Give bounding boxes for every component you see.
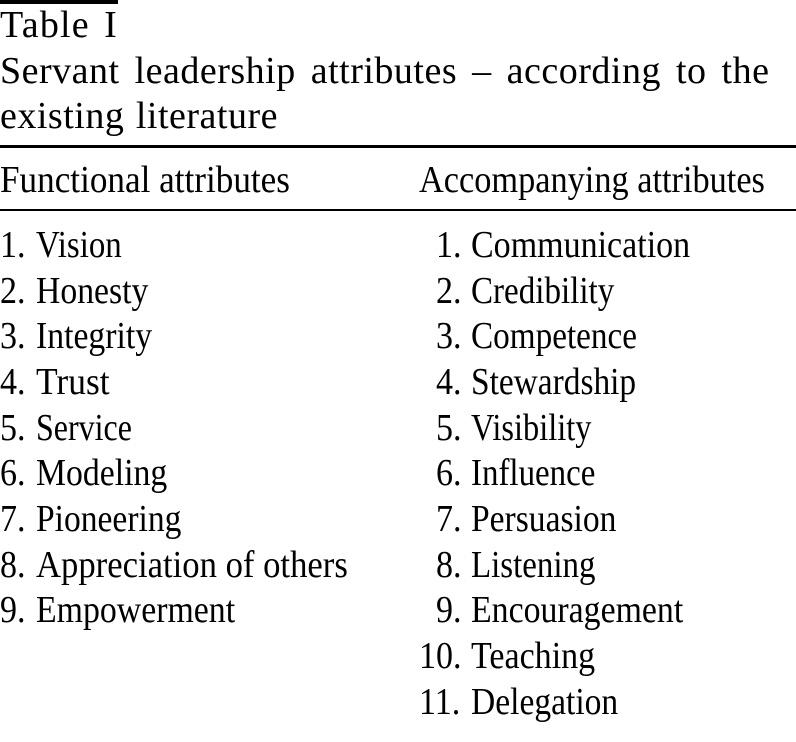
header rule (0, 145, 796, 148)
accompanying attributes list: 2. (436, 270, 462, 312)
accompanying attributes list: 5. (436, 407, 462, 449)
functional attributes list: Service (36, 407, 132, 449)
accompanying attributes list: 8. (436, 544, 462, 586)
functional attributes list: 5. (0, 407, 26, 449)
functional attributes list: 8. (0, 544, 26, 586)
accompanying attributes list: Persuasion (471, 498, 616, 540)
table label: Table I (0, 4, 118, 46)
functional attributes list: Empowerment (36, 589, 235, 631)
accompanying attributes list: 10. (419, 635, 462, 677)
accompanying attributes list: Influence (471, 452, 595, 494)
accompanying attributes list: Communication (471, 224, 690, 266)
accompanying attributes list: Encouragement (471, 589, 683, 631)
accompanying attributes list: Competence (471, 315, 637, 357)
functional attributes list: Modeling (36, 452, 167, 494)
functional attributes list: Honesty (36, 270, 148, 312)
functional attributes list: 7. (0, 498, 26, 540)
accompanying attributes list (419, 224, 690, 723)
functional attributes list: 4. (0, 361, 26, 403)
table title: Servant leadership attributes – according to the (0, 50, 769, 92)
functional attributes list: 9. (0, 589, 26, 631)
functional attributes list: 3. (0, 315, 26, 357)
functional attributes list: 6. (0, 452, 26, 494)
functional attributes list: Integrity (36, 315, 152, 357)
accompanying attributes list: 4. (436, 361, 462, 403)
column headers: Accompanying attributes (419, 159, 765, 201)
accompanying attributes list: Delegation (471, 681, 618, 723)
top rule (0, 0, 118, 4)
functional attributes list: 2. (0, 270, 26, 312)
header bottom rule (0, 209, 796, 211)
accompanying attributes list: Teaching (471, 635, 595, 677)
column headers: Functional attributes (0, 159, 290, 201)
functional attributes list: Trust (36, 361, 110, 403)
column headers (0, 159, 765, 201)
accompanying attributes list: 3. (436, 315, 462, 357)
functional attributes list (0, 224, 348, 631)
table title (0, 50, 769, 137)
accompanying attributes list: Listening (471, 544, 595, 586)
accompanying attributes list: 6. (436, 452, 462, 494)
functional attributes list: 1. (0, 224, 26, 266)
table title: existing literature (0, 95, 278, 137)
accompanying attributes list: 7. (436, 498, 462, 540)
accompanying attributes list: Credibility (471, 270, 614, 312)
accompanying attributes list: 11. (419, 681, 460, 723)
functional attributes list: Pioneering (36, 498, 181, 540)
accompanying attributes list: Visibility (471, 407, 591, 449)
accompanying attributes list: 1. (436, 224, 462, 266)
functional attributes list: Appreciation of others (36, 544, 348, 586)
functional attributes list: Vision (36, 224, 122, 266)
accompanying attributes list: Stewardship (471, 361, 636, 403)
accompanying attributes list: 9. (436, 589, 462, 631)
